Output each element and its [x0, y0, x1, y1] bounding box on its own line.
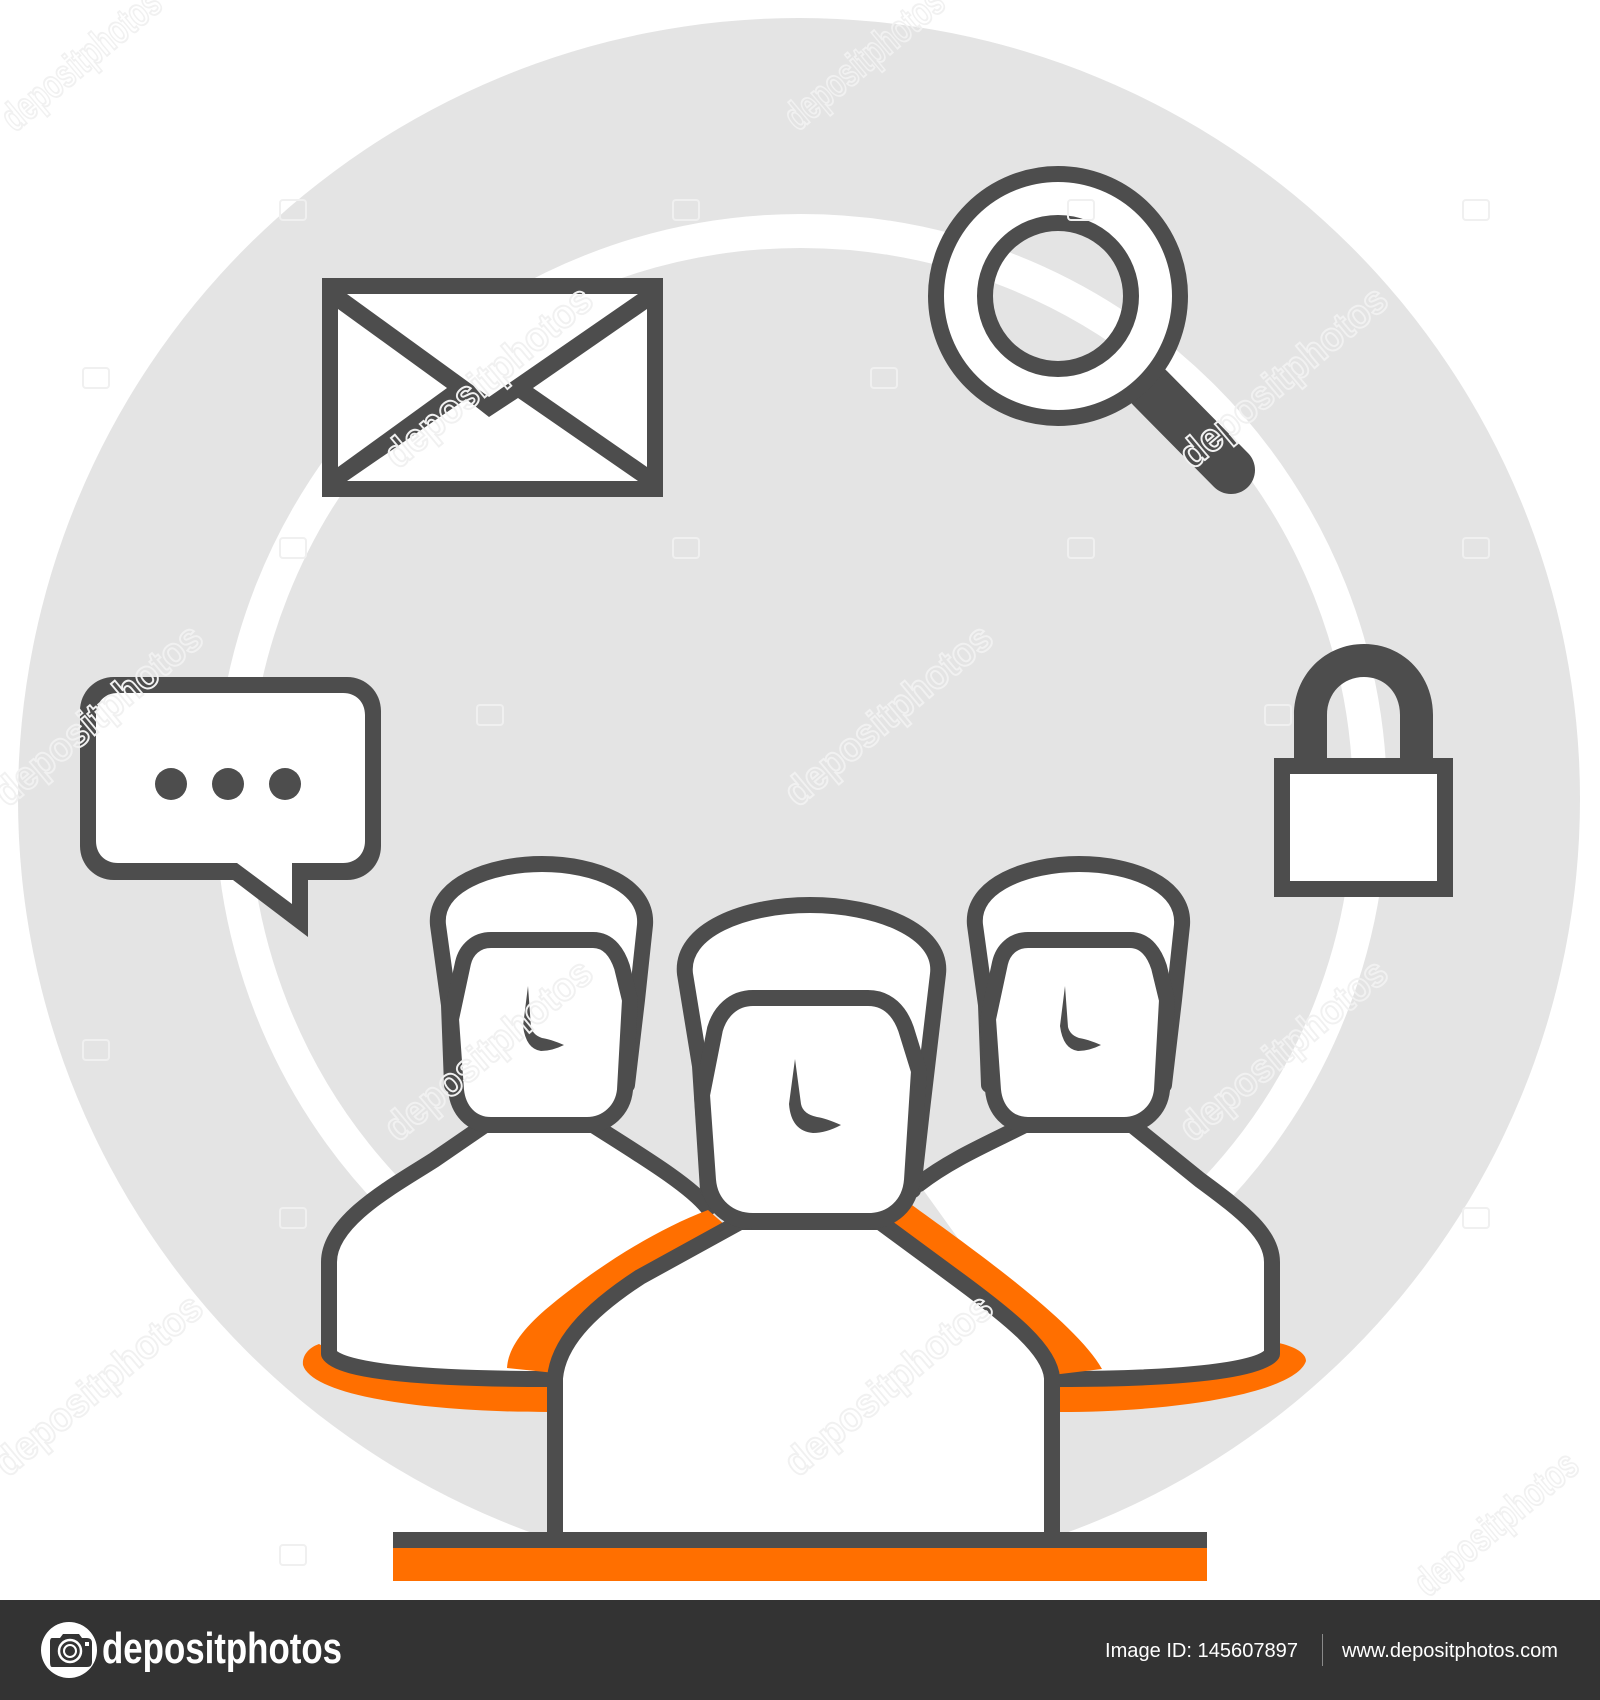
orange accent: right shoulder [885, 1200, 1102, 1375]
orange accent: right base [1060, 1343, 1306, 1412]
watermark: depositphotos [376, 950, 601, 1150]
watermark: depositphotos [1171, 950, 1396, 1150]
person: right [919, 864, 1272, 1379]
footer logo [41, 1622, 342, 1678]
footer logo: depositphotos [102, 1624, 342, 1673]
footer bar [0, 1600, 1600, 1700]
desk [393, 1532, 1207, 1581]
person: left [329, 864, 708, 1379]
icon: padlock [1282, 644, 1445, 889]
people group [303, 864, 1306, 1540]
orange accent: left shoulder [507, 1210, 725, 1373]
watermark: depositphotos [376, 277, 601, 477]
watermark: depositphotos [1171, 277, 1396, 477]
image id: Image ID: 145607897 [1105, 1640, 1298, 1662]
white ring [232, 231, 1370, 1369]
icon: envelope [322, 278, 663, 497]
icon: magnifying glass [936, 174, 1231, 470]
orange accent: left base [303, 1344, 549, 1412]
watermark: depositphotos [776, 1285, 1001, 1485]
watermark: depositphotos [776, 615, 1001, 815]
website url: www.depositphotos.com [1341, 1640, 1558, 1662]
icon: speech bubble [80, 677, 381, 937]
person: centre [555, 905, 1052, 1540]
